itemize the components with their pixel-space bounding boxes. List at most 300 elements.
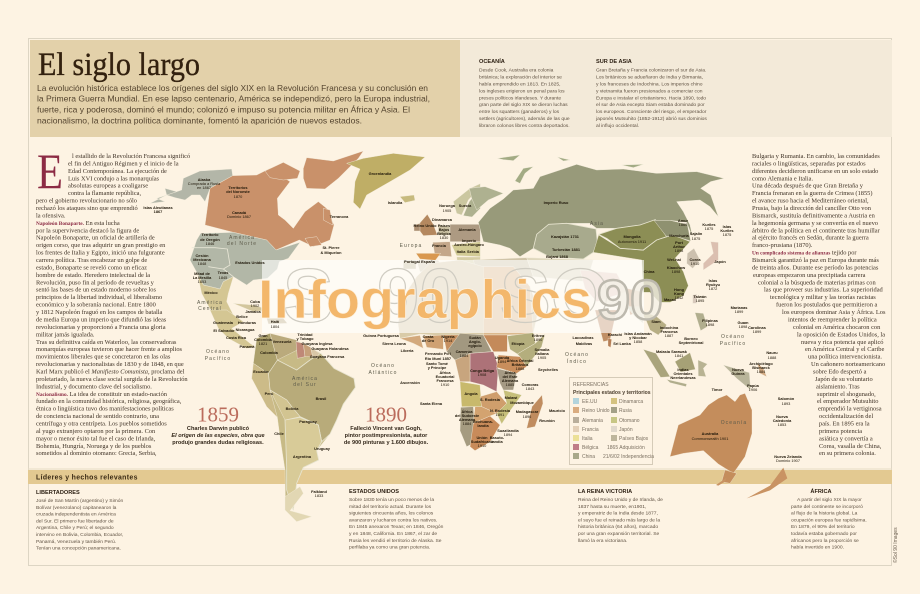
map: world colonial territories [143,151,803,522]
map labels: territories: Bechuana- [473,419,494,424]
text column: right article: nueva y rica potencia que aplicó [801,339,884,346]
map labels: oceans and continents: Pacífico [205,356,231,362]
map labels: territories: Bismarck [752,365,771,370]
map labels: territories: 1898 [672,269,680,274]
map labels: territories: 1898 [739,324,747,329]
text block: Libertadores: José de San Martín (argentino) y Simón [36,498,124,504]
map labels: territories: Angola [464,391,478,396]
map labels: territories: Unión [476,435,488,440]
text block: Libertadores: Argentina, Chile y Perú; el segundo [36,525,114,531]
map labels: territories: Orientales [673,371,693,376]
section band: Líderes y hechos relevantes [28,469,892,484]
map labels: territories: 1896 [523,414,531,419]
text column: right article: Bismarck garantizó la paz en Europa durante más [752,257,879,264]
map labels: territories: Somalia [535,347,550,352]
text column: left article: carrera política. Tras encabezar un golpe de [36,257,147,264]
map labels: territories: 1898 [675,248,683,253]
text block: Sur de Asia: Gran Bretaña y Francia colonizaron el sur de Asia. [596,68,706,74]
text column: left article: absolutas europeas a coaligarse [68,183,148,190]
text column: right article: suprimir el shogunado, [817,391,876,398]
text block: África: ocupación europea fue rapidísima. [791,517,867,523]
map labels: territories: en 1867 [197,185,211,190]
map labels: territories: del Noroeste [226,189,251,194]
landmass: New Zealand [716,468,787,498]
text block: Oceanía: entre los squatters (ganaderos) y los [479,109,560,115]
map labels: territories: Islas Andamán [624,331,652,336]
map labels: territories: 1905 [443,208,451,213]
text column: right article: Corea, vasalla de China, [819,443,882,450]
map labels: territories: 1842 [675,295,683,300]
callout: 1890 Van Gogh [344,402,429,446]
text block: La reina Victoria: historia británica (64 años), marcado [578,524,658,530]
map labels: territories: Sri Lanka [613,341,632,346]
text column: right article: la hegemonía germana y se convertía en el nuevo [752,220,878,227]
map labels: territories: Sudafricana [471,439,494,444]
map labels: territories: 1884 [757,369,766,374]
map labels: territories: de Oregón [200,237,220,242]
text block: La reina Victoria [578,489,663,544]
map labels: territories: Taiwán [694,294,707,299]
map labels: territories: Guinea [731,371,745,376]
map labels: territories: Malawi [505,395,517,400]
map labels: oceans and continents: Pacífico [720,341,746,347]
text block: Sur de Asia [595,59,707,129]
text block: Sur de Asia: al influjo occidental. [596,123,639,129]
text column: left article: centrífuga y otra centrípeta. Los pueblos sometidos [36,420,167,428]
text column: left article: Edad Contemporánea. La ejecución de [68,168,167,175]
map labels: territories: 1906 [749,387,757,392]
map labels: territories: Guayana Holandesa [311,346,349,351]
text column: right article: diferentes decidieron unificarse en un solo estado [752,168,878,175]
map labels: territories: Laccadivas [573,335,593,340]
map labels: territories: Comoras [522,382,538,387]
callout: 1859 Darwin: 1859 [197,402,239,426]
map labels: territories: 1875 [723,232,731,237]
map labels: territories: y Nicobar [629,335,647,340]
legend: referencias: Alemania [582,418,603,424]
map labels: territories: 1910 [691,261,700,266]
map labels: territories: Madagascar [516,409,539,414]
text block: Oceanía: gran parte del siglo XIX se dieron luchas [479,102,568,108]
map labels: territories: Filipinas [702,318,718,323]
map labels: territories: Septentrional [679,340,703,345]
text block: La reina Victoria: el suyo fue el reinado más largo de la [578,517,660,523]
map labels: territories: 1821 [259,341,267,346]
text column: right article: los europeos dominar Asia y África. Los [782,308,886,316]
text column: left article: Nacionalismo. La idea de constituir un estado-nación [36,391,168,398]
text column: left article: económico y la soberanía nacional. Entre 1800 [36,302,156,309]
map labels: territories: Dominio 1907 [776,458,800,463]
map labels: territories: Port [675,240,684,245]
map labels: territories: Venezuela [273,339,292,344]
text block: Oceanía: británica; la exploración del interior se [479,75,562,81]
text block: África: africanos pero la proporción se [791,538,859,544]
map labels: territories: Gran [258,333,268,338]
map labels: territories: Caledonia [773,418,792,423]
text block: África: había invertido en 1900. [791,545,844,551]
map labels: territories: 1894 [504,432,513,437]
text column: right article: Bulgaria y Rumania. En cambio, las comunidades [752,153,880,160]
landmass: Asia [469,155,724,315]
map labels: territories: Kazajstán 1731 [551,234,580,239]
map labels: oceans and continents: Índico [567,358,587,365]
text block: Oceanía: settlers (agricultores), además de las que [479,116,570,122]
legend: referencias: Dinamarca [619,399,643,405]
map labels: territories: Serbia [467,249,480,254]
map labels: territories: Bolivia [286,406,299,411]
text block: Estados Unidos [349,489,444,551]
map labels: territories: Kong [674,291,685,296]
text column: left article: Tras su definitiva caída en Waterloo, las conservadoras [36,339,177,346]
map labels: oceans and continents: América [229,235,255,241]
map labels: territories: Alemana [502,378,519,383]
watermark band and lettering: SO [500,254,610,339]
map labels: territories: 1910 [441,382,450,387]
map labels: territories: landia [477,423,489,428]
text column: right article: sobre Edo despertó a [813,368,867,376]
map labels: territories: Commonwealth 1901 [692,436,728,441]
map labels: territories: Islandia [388,200,403,205]
map labels: territories: Etiopía [512,341,525,346]
text column: left article: fundado en la comunidad histórica, religiosa, geográfica, [36,398,182,405]
map labels: territories: Colombia [260,350,279,355]
map labels: oceans and continents: Central [198,306,222,312]
map labels: territories: Autonomía 1911 [618,239,646,244]
map labels: territories: Neerlandesas [670,375,696,380]
map labels: territories: La Mesilla [193,275,212,280]
map labels: territories: Británica [512,362,529,367]
callout: 1890 Van Gogh: de 900 pinturas y 1.600 dibujos. [344,440,429,446]
text column: right article: Un cañonero norteamericano [811,361,885,368]
map labels: territories: Guam [737,320,749,325]
landmass: Africa and Madagascar [398,260,545,451]
map labels: territories: egipcio [468,343,482,348]
legend: referencias: Reino Unido [582,408,610,414]
map labels: oceans and continents: Europa [400,243,422,249]
text column: left article: por la supervivencia destacó la figura de [36,227,139,234]
map labels: territories: Reunión [539,418,555,423]
map labels: territories: 1893 [782,401,790,406]
text column: left article: y 1812 Napoleón fraguó en los campos de batalla [36,309,163,316]
callout: 1890 Van Gogh: 1890 [365,402,407,426]
text block: Sur de Asia: Europa e instalar el cristianismo. Hacia 1890, todo [596,95,706,101]
map labels: territories: Japón [714,259,726,264]
text column: right article: primera potencia [819,428,862,435]
map labels: territories: Kuriles [702,222,716,227]
text column: right article: árbitro de la política en el continente tras humillar [752,227,881,234]
callout: 1890 Van Gogh: pintor postimpresionista, autor [345,433,428,439]
text column: left article: mayor o menor éxito tal fue el caso de Irlanda, [36,435,156,442]
text block: Estados Unidos: avanzaron y lucharon contra los nativos. [349,517,437,523]
map labels: territories: & Miquelon [321,250,342,255]
text block: Oceanía: OCEANÍA [479,57,505,65]
text column: right article: aislamiento. Tras [816,383,860,390]
map labels: territories: Nueva Zelanda [774,454,803,459]
map labels: territories: Timor [712,387,723,392]
map labels: territories: Noruega [439,203,456,208]
map labels: territories: Siam [651,319,661,324]
map labels: territories: Trinidad [297,332,313,337]
map labels: territories: África [439,370,451,375]
map labels: territories: Nueva [776,414,789,419]
intro text: la Primera Guerra Mundial. En ese lapso centenario, América se independizó, pero la Europa industrial, [37,94,430,104]
legend: referencias: 21/6/02 Independencia [603,454,654,460]
text block: La reina Victoria: por una gran expansión territorial. Se [578,531,659,537]
text block: Libertadores: Bolívar (venezolano) capitanearon la [36,505,117,511]
map labels: oceans and continents: Oceanía [721,420,747,426]
text block: La reina Victoria: Reina del Reino Unido y de Irlanda, de [578,497,663,503]
map labels: territories: Karachi [608,332,622,337]
text block: Sur de Asia: el sur de Asia excepto Siam estaba dominado por [596,102,705,108]
map labels: territories: 1845 [219,275,227,280]
map labels: oceans and continents: Asia [590,221,604,227]
map labels: territories: Nicaragua [236,327,255,332]
text block: Estados Unidos: Rusia les vendió el territorio de Alaska. Se [349,538,442,544]
map labels: territories: 1888 [768,355,776,360]
map labels: territories: Maldivas [576,341,592,346]
text block: Libertadores: LIBERTADORES [36,490,80,496]
map labels: territories: 1875 [705,226,713,231]
map labels: territories: Nueva [732,367,745,372]
map labels: territories: St. Pierre [322,245,340,250]
intro text: La evolución histórica establece los orígenes del siglo XIX en la Revolución Francesa y su conclusión en [37,83,428,93]
map labels: territories: 1872 [709,286,717,291]
text column: right article: de treinta años. Durante ese período las potencias [752,264,879,272]
map labels: territories: Comprada a Rusia [188,181,221,186]
map labels: territories: Mozambique [510,400,535,405]
map labels: territories: Sarawak [671,349,688,354]
map labels: territories: Uganda [495,355,510,360]
map labels: oceans and continents: Océano [721,334,745,340]
text block: Oceanía: presos políticos irlandeses. Y durante [479,95,561,101]
text column: right article: tecnológica y militar y las teorías racistas [770,294,876,301]
map labels: territories: Mongolia [623,234,641,239]
map labels: territories: Guinea Portuguesa [363,333,400,338]
legend: referencias: Países Bajos [619,436,649,442]
map labels: territories: Cuba [250,299,261,304]
text block: Libertadores: Panamá, Venezuela y también Perú. [36,539,116,545]
map labels: territories: landia [491,439,503,444]
legend: referencias: Japón [619,427,633,433]
map labels: territories: Guayana Francesa [310,354,345,359]
map labels: territories: 1804 [271,324,280,329]
text column: right article: Bismarck, sustituía definitivamente a Austria en [752,212,876,219]
map labels: territories: Mexicana [193,257,212,262]
text block: Estados Unidos: En 1845 anexaron Texas; en 1846, Oregón [349,524,444,530]
map labels: territories: Nauru [766,350,778,355]
map labels: territories: Amur [678,218,689,223]
text column: left article: monarquías europeas tuvieron que hacer frente a amplios [36,346,183,353]
map labels: territories: y Tobago [296,336,314,341]
map labels: territories: Liberia [401,348,414,353]
text column: left article: de media Europa un imperio que difundió las ideas [36,316,167,324]
legend: referencias: Francia [582,427,599,433]
text block: Libertadores: cruzada independentista en América [36,512,116,518]
map labels: territories: Estados Unidos [235,260,265,265]
text column: right article: Japón de su voluntario [815,376,873,383]
map labels: territories: 1875 [692,236,700,241]
text block: África: parte del continente se incorporó [791,504,863,510]
text block: África: ÁFRICA [810,488,832,495]
map labels: territories: Islas [709,278,717,283]
map labels: territories: 1860 [679,222,688,227]
text column: right article: Francia frenaran en la guerra de Crimea (1855) [752,190,872,197]
text column: left article: l estallido de la Revolución Francesa significó [72,153,190,160]
map labels: territories: Australia [702,431,719,436]
map labels: territories: 1887 [665,333,673,338]
watermark band and lettering: S [283,254,334,339]
text column: right article: al ejército francés en Sedán, durante la guerra [752,235,869,242]
map labels: territories: Seychelles [538,367,558,372]
text block: La reina Victoria: llamó la era victoriana. [578,538,627,544]
text block: África: al flujo de la historia global. La [791,511,858,517]
panel: header side notes [460,40,892,137]
text column: left article: Luis XVI condujo a las monarquías [68,175,160,182]
map labels: territories: Italia [457,249,466,254]
map labels: territories: Francesa [436,378,454,383]
map labels: territories: Francia [432,243,447,248]
map labels: territories: Papúa [747,383,760,388]
title: El siglo largo [38,47,200,83]
watermark band and lettering: 90 [597,268,663,331]
landmass: Central and South America [210,303,355,522]
map labels: territories: Argentina [293,454,312,459]
map labels: territories: 1894 [498,359,507,364]
text block: La reina Victoria: 1837 hasta su muerte, en1901, [578,504,646,510]
callout: 1859 Darwin: Charles Darwin publicó [187,426,250,432]
text column: right article: europeas empezaron una precipitada carrera [753,272,866,279]
text column: left article: estado, Bonaparte se reveló como un eficaz [36,264,147,272]
text column: right article: colonial en América chocaron con [793,324,881,331]
map labels: territories: Sajalín [690,231,703,236]
text column: right article: el avance ruso hacia el Mediterráneo oriental, [752,198,869,205]
map labels: territories: Cesión [196,253,209,258]
map labels: territories: 1902 [251,303,259,308]
map labels: oceans and continents [197,221,747,426]
watermark band and lettering: 90 [377,254,462,339]
map labels: territories: Kiaochow [667,265,686,270]
map labels: territories: 1843 [526,386,534,391]
text column: right article: la oposición de Estados Unidos, la [797,331,885,338]
map labels: territories: 1841 [675,353,683,358]
text block: Sur de Asia: los europeos. Consciente del riesgo, el emperador [596,109,707,115]
text column: right article: colonial a la búsqueda de materias primas con [758,279,876,286]
map labels: territories: 1908 [478,372,486,377]
map labels: territories: Territorio [201,232,219,237]
map labels: territories: África [504,370,516,375]
text block: África: todavía estaba gobernado por [791,531,857,537]
map labels: oceans and continents: Océano [206,349,230,355]
map labels: territories: China [644,269,655,274]
map labels: territories: Sudán [469,335,482,340]
text column: left article: Bohemia, Hungría, Noruega y de los pueblos [36,443,152,450]
text block: Oceanía: los ingleses erigieron un penal para los [479,88,565,94]
text column: right article: país. En 1895 era la [819,420,870,428]
text block: Estados Unidos: ESTADOS UNIDOS [349,489,399,495]
map labels: territories: del Este [503,374,518,379]
map labels: territories: Uruguay [314,446,331,451]
credit: ©Sol 90 Images [892,527,899,563]
text block: Oceanía: Desde Cook, Australia era colonia [479,68,554,74]
map labels: territories: 1884 [463,421,472,426]
text column: left article: al yugo extranjero optaron por la primera. Con [36,428,156,435]
map labels: territories: 1848 [198,261,206,266]
map labels: territories: 1890 [534,337,543,342]
map labels: territories: Belice [236,314,249,319]
text block: Sur de Asia: japonés Mutsuhito (1852-1912) abrió sus dominios [595,116,707,122]
map labels: territories: Honduras [238,320,256,325]
text column: left article: contra la flamante república, [68,190,142,197]
map labels: territories: Ryukyu [706,282,721,287]
legend: referencias: REFERENCIAS [573,382,609,388]
text column: right article: occidentalización del [819,413,873,420]
intro text: fuerte, rica y poderosa, dominó el mundo; colonizó e impuso su potencia militar en África y Asia. El [37,104,410,114]
map labels: territories: Hong [674,287,685,292]
map labels: territories: 1905 [538,355,546,360]
panel: header introduction [30,40,460,137]
text column: left article: de conciencia nacional de sentido contrario, una [36,413,159,420]
intro text: nacionalismo, la doctrina política dominante, fomentó la aparición de nuevos estados. [37,115,362,125]
map labels: territories: África [461,409,473,414]
map labels: territories: Camerún [456,349,473,354]
map labels: territories: Guayana Inglesa [302,341,333,346]
text block: La reina Victoria: y emperatriz de la India desde 1877, [578,511,658,517]
map labels: territories: Ascensión [400,380,420,385]
text block: Libertadores [36,490,124,552]
map labels: territories: S. Rodesia [480,397,501,402]
text column: right article: asiática y convertía a [819,435,873,442]
map labels: territories: 1899 [753,329,761,334]
map labels: territories: de Oro [422,338,435,343]
text block: Estados Unidos: y en 1848, California. En 1867, el zar de [349,531,437,537]
text column: left article [36,143,190,457]
text block: La reina Victoria: LA REINA VICTORIA [578,489,632,495]
map labels: territories: Suazilandia [497,428,520,433]
text block: Oceanía [479,57,570,129]
map labels: territories: Mauricio [549,408,566,413]
section band: Líderes y hechos relevantes: Líderes y hechos relevantes [36,474,138,482]
map labels: territories: Islas Aleutianas [143,205,173,210]
map labels: territories: Anglo- [469,339,482,344]
map labels: territories: Indochina [660,325,679,330]
map labels: territories: 1867 [154,209,162,214]
text column: right article: una política intervencionista. [808,354,882,361]
legend: referencias: Rusia [619,408,632,414]
text column: left article: principios de la libertad individual, el liberalismo [36,294,162,301]
text block: África [791,488,867,551]
legend: referencias: China [582,454,595,460]
text column: left article: los frentes de Italia y Egipto, inició una fulgurante [36,250,165,257]
watermark band and lettering: Infographics [258,268,592,330]
map labels: territories: Groenlandia [369,171,392,176]
text block: África: En 1879, el 90% del territorio [791,524,855,530]
callout: 1859 Darwin: El origen de las especies, obra que [171,433,265,439]
map labels: territories: 1846 [206,241,214,246]
map labels: territories: Austro-Húngaro [454,242,485,247]
map labels: territories: y Príncipe [428,365,447,370]
map labels: territories: Santa Elena [420,401,443,406]
text column: right article: Prusia, bajo la dirección del canciller Otto von [752,205,872,212]
map labels: territories: Río Muni 1857 [425,356,451,361]
map labels: territories: 1888 [516,366,524,371]
map labels: territories: Nigeria [441,334,455,339]
map labels: territories: 1858 [634,339,642,344]
text column: left article: hombre de estado. Heredero intelectual de la [36,272,150,279]
watermark band and lettering [258,254,663,339]
text column: left article: étnica o lingüística tuvo dos manifestaciones políticas [36,406,174,413]
map labels: territories: Alaska [198,177,211,182]
map labels: territories: Bélgica [437,231,452,236]
